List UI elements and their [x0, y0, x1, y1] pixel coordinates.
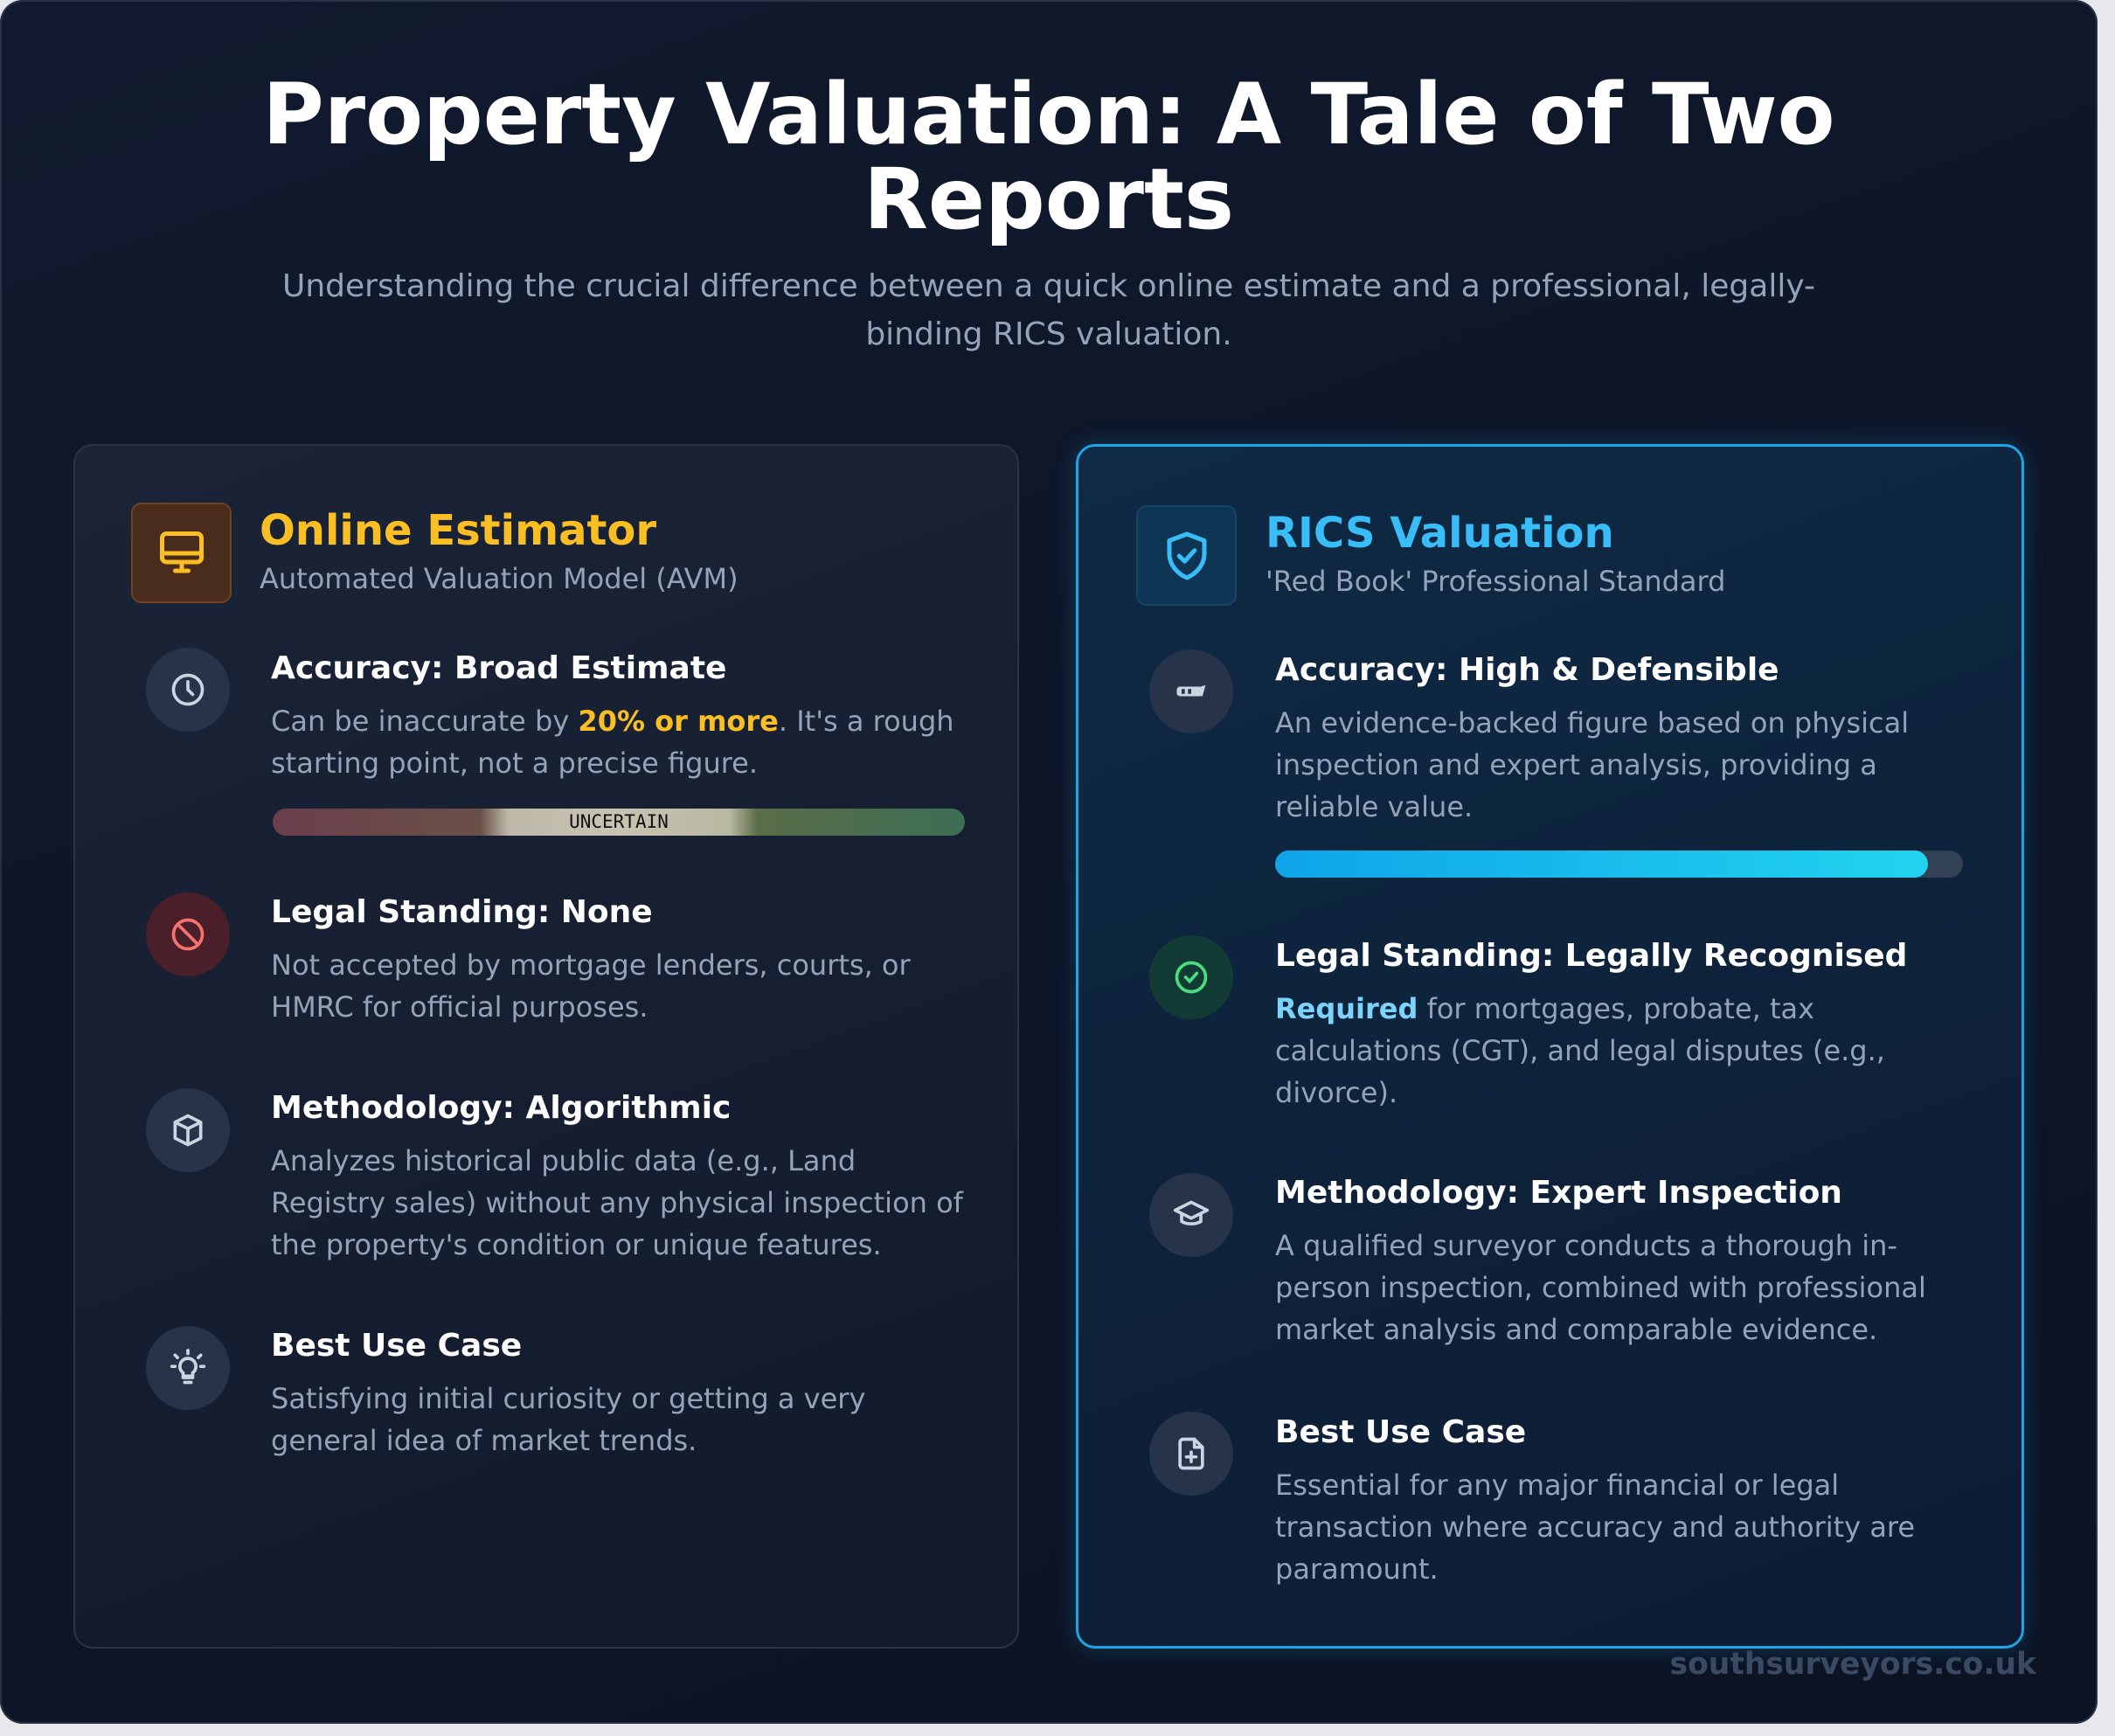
icon: monitor — [131, 503, 232, 603]
heading: rics valuation — [1266, 509, 1725, 598]
item: legal standing: divorce). — [1275, 1076, 1397, 1109]
item: accuracy: reliable value. — [1275, 790, 1473, 823]
item: legal standing: Not accepted by mortgage lenders, courts, or — [271, 948, 911, 982]
item: legal standing: Legal Standing: Legally Recognised — [1275, 938, 1907, 974]
heading: rics valuation: RICS Valuation — [1266, 509, 1614, 558]
item: best use — [1275, 1414, 1915, 1586]
item: methodology: the property's condition or unique features. — [271, 1228, 882, 1261]
item: legal standing — [271, 894, 911, 1024]
item: best use: Best Use Case — [271, 1328, 522, 1364]
bar: uncertain — [273, 809, 965, 836]
item: accuracy: An evidence-backed figure based on physical — [1275, 706, 1909, 740]
heading: online estimator: Automated Valuation Model (AVM) — [260, 562, 739, 595]
item: best use: Essential for any major financial or legal — [1275, 1469, 1839, 1502]
icon: clock — [146, 648, 230, 732]
item: best use: paramount. — [1275, 1552, 1439, 1586]
icon: lightbulb — [146, 1326, 230, 1410]
icon: check — [1149, 935, 1233, 1019]
icon: gauge — [1149, 649, 1233, 733]
item: accuracy: inspection and expert analysis, providing a — [1275, 748, 1877, 781]
item: legal standing: Legal Standing: None — [271, 894, 653, 930]
heading: online estimator — [260, 506, 739, 595]
item: best use: transaction where accuracy and authority are — [1275, 1510, 1915, 1544]
subtitle: Understanding the crucial difference between a quick online estimate and a professional, legally- — [282, 268, 1815, 304]
subtitle: binding RICS valuation. — [865, 316, 1232, 352]
item: methodology: market analysis and comparable evidence. — [1275, 1313, 1877, 1346]
item: legal standing: Required for mortgages, probate, tax — [1275, 992, 1814, 1025]
item: methodology: Methodology: Algorithmic — [271, 1090, 731, 1126]
heading: rics valuation: 'Red Book' Professional Standard — [1266, 565, 1725, 598]
title: Property Valuation: A Tale of Two — [262, 66, 1835, 163]
item: legal standing — [1275, 938, 1907, 1109]
bar: high accuracy — [1275, 851, 1963, 878]
item: accuracy: starting point, not a precise figure. — [271, 746, 758, 780]
item: methodology: person inspection, combined with professional — [1275, 1271, 1926, 1304]
item: best use — [271, 1328, 865, 1457]
item: accuracy — [271, 650, 954, 780]
item: accuracy — [1275, 652, 1909, 823]
item: accuracy: Accuracy: High & Defensible — [1275, 652, 1779, 688]
item: methodology — [1275, 1175, 1926, 1346]
item: accuracy: Accuracy: Broad Estimate — [271, 650, 726, 686]
item: legal standing: calculations (CGT), and legal disputes (e.g., — [1275, 1034, 1885, 1067]
item: best use: general idea of market trends. — [271, 1424, 697, 1457]
subtitle — [282, 268, 1815, 352]
item: methodology: A qualified surveyor conducts a thorough in- — [1275, 1229, 1897, 1262]
bar: uncertain: UNCERTAIN — [569, 811, 669, 832]
item: methodology: Analyzes historical public data (e.g., Land — [271, 1144, 856, 1177]
icon: ban — [146, 892, 230, 976]
item: methodology: Registry sales) without any physical inspection of — [271, 1186, 963, 1219]
icon: cube — [146, 1088, 230, 1172]
item: legal standing: HMRC for official purposes. — [271, 990, 648, 1024]
item: methodology: Methodology: Expert Inspection — [1275, 1175, 1842, 1211]
footer: website: southsurveyors.co.uk — [1670, 1647, 2036, 1682]
panel: online estimator — [73, 444, 1019, 1649]
icon: graduation cap — [1149, 1173, 1233, 1257]
item: best use: Satisfying initial curiosity or getting a very — [271, 1382, 865, 1415]
panel: rics valuation — [1076, 444, 2024, 1649]
item: methodology — [271, 1090, 963, 1261]
item: best use: Best Use Case — [1275, 1414, 1526, 1450]
icon: document — [1149, 1412, 1233, 1496]
heading: online estimator: Online Estimator — [260, 506, 656, 555]
icon: shield — [1136, 505, 1237, 606]
item: accuracy: Can be inaccurate by 20% or more. It's a rough — [271, 705, 954, 738]
title — [262, 66, 1835, 248]
title: Reports — [863, 150, 1234, 248]
